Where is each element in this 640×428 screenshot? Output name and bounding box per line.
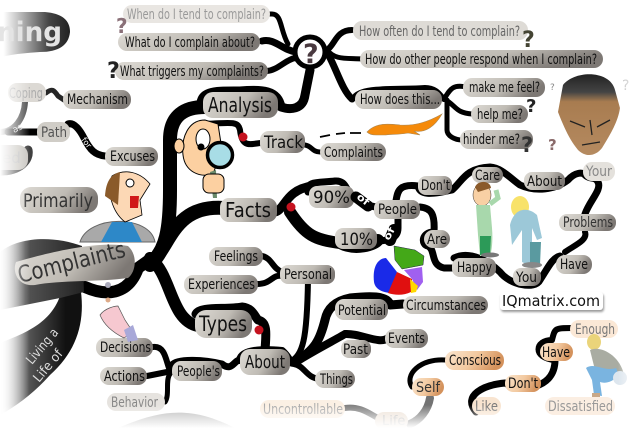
watermark: IQmatrix.com: IQmatrix.com xyxy=(502,292,600,310)
pill: Feelings: Feelings xyxy=(214,249,258,265)
orange panel branches xyxy=(345,328,572,424)
pill: Happy xyxy=(452,258,496,277)
pill: People's: People's xyxy=(177,364,220,380)
pill: Analysis: Analysis xyxy=(208,93,272,117)
main branch trunks xyxy=(85,70,378,326)
pill: Have (gray): Have xyxy=(560,257,588,273)
pill: Types: Types xyxy=(198,312,247,336)
question marks: ? xyxy=(622,78,629,94)
pill: Potential xyxy=(335,299,388,320)
pill: Events xyxy=(385,329,428,348)
pill: About top: About xyxy=(527,174,562,190)
question marks: ? xyxy=(522,28,535,53)
pill: Path: Path xyxy=(41,125,67,141)
top-left heading fragment: ning xyxy=(0,12,70,57)
pill: What triggers my complaints xyxy=(115,62,268,80)
dark band: Living a Life of xyxy=(0,285,82,415)
pill: Events: Events xyxy=(388,331,425,347)
pill: When do I tend to complain xyxy=(123,5,270,23)
pill: Things: Things xyxy=(319,372,353,388)
pill: People's xyxy=(172,361,222,381)
pill: What do I complain about xyxy=(118,33,260,51)
analysis question branches xyxy=(262,14,472,140)
pill: How often do I tend to complain: How often do I tend to complain? xyxy=(359,24,520,40)
pill: 10%: 10% xyxy=(340,230,373,250)
icon: man with magnifying glass xyxy=(174,120,232,198)
pill: Coping xyxy=(8,83,46,102)
pill: Past: Past xyxy=(343,342,368,358)
gray shapes at bottom edge xyxy=(118,413,235,428)
pill: make me feel: make me feel? xyxy=(469,80,540,96)
left branches xyxy=(0,90,105,171)
pill: Excuses: Excuses xyxy=(110,149,155,165)
pill: Experiences: Experiences xyxy=(188,277,255,293)
pill: Decisions: Decisions xyxy=(100,340,151,356)
pill: help me xyxy=(471,105,528,123)
icon: dissatisfied man xyxy=(586,334,627,401)
pill: Things xyxy=(315,370,355,388)
pill: hinder me: hinder me? xyxy=(463,132,520,148)
facts sentence branches xyxy=(308,167,599,285)
question circle hub: ? xyxy=(303,39,319,70)
pill: Don't: Don't xyxy=(421,178,450,194)
pill: Like: Like xyxy=(475,399,498,415)
question marks: ? xyxy=(550,83,555,93)
pill: How often do I tend to complain xyxy=(353,21,528,40)
pill: Track: Track xyxy=(263,133,303,153)
dark arc behind central topic xyxy=(0,239,84,310)
pill: Problems: Problems xyxy=(563,215,613,231)
question marks: ? xyxy=(548,136,557,154)
pill: ed fragment: ed xyxy=(2,149,21,167)
pill: Your: Your xyxy=(585,164,612,180)
dark band: Living a Life of: Life of xyxy=(31,347,67,386)
pill: About xyxy=(240,349,290,375)
question marks: ? xyxy=(521,133,533,157)
pill: Complaints small: Complaints xyxy=(324,145,383,161)
question marks: ? xyxy=(107,59,120,84)
pill: Dissatisfied: Dissatisfied xyxy=(548,399,613,415)
question marks xyxy=(107,14,629,157)
pill: Personal xyxy=(280,265,335,284)
icon: blond man xyxy=(510,196,542,268)
pill: Enough xyxy=(570,320,618,338)
pill: ed fragment xyxy=(0,145,28,170)
question circle hub xyxy=(295,37,325,70)
pill: Personal: Personal xyxy=(284,267,332,283)
red dots xyxy=(238,132,296,334)
icon: pie chart xyxy=(374,246,424,295)
pill: Feelings xyxy=(209,247,263,266)
pill: About: About xyxy=(245,352,285,373)
pill: Circumstances: Circumstances xyxy=(406,298,486,314)
types branches xyxy=(147,256,403,402)
pill: What do I complain about: What do I complain about? xyxy=(125,35,255,51)
pill: Primarily: Primarily xyxy=(23,190,93,212)
pill: Don't xyxy=(418,176,452,195)
pill: Conscious: Conscious xyxy=(449,353,501,369)
pill: When do I tend to complain: When do I tend to complain? xyxy=(127,7,266,23)
pill: Experiences xyxy=(184,275,258,294)
icon: angry driver xyxy=(80,172,155,242)
pill: 90%: 90% xyxy=(313,188,350,208)
pill: Conscious xyxy=(445,351,504,370)
pill: Uncontrollable: Uncontrollable xyxy=(263,402,343,418)
central topic: Complaints: Complaints xyxy=(15,237,128,289)
pill: Self: Self xyxy=(416,380,441,396)
icon: man in green xyxy=(473,182,499,258)
connector word: of (10%): of xyxy=(382,225,398,242)
icon: orange lizard xyxy=(320,114,442,137)
pill: make me feel xyxy=(463,78,545,97)
connector word: of (90%): of xyxy=(354,192,372,209)
pill: Mechanism xyxy=(63,90,131,109)
pill: help me: help me? xyxy=(477,107,523,123)
question marks: ? xyxy=(526,96,536,117)
pill: Have (orange): Have xyxy=(542,345,570,361)
pill: Behavior: Behavior xyxy=(111,395,158,411)
pill: How does this xyxy=(355,90,442,109)
pill: Decisions xyxy=(96,338,153,357)
pill: Mechanism: Mechanism xyxy=(67,92,128,108)
pill: Complaints small xyxy=(320,143,386,161)
pill: Potential: Potential xyxy=(338,303,386,319)
pill: Coping: Coping xyxy=(9,86,43,102)
pill: Care: Care xyxy=(475,168,500,184)
pill: Excuses xyxy=(105,147,158,166)
pill: People: People xyxy=(378,202,417,218)
left branches: for xyxy=(79,136,94,150)
pill: Have (gray) xyxy=(556,255,592,274)
question marks: ? xyxy=(116,14,128,38)
pill: How does this: How does this... xyxy=(360,92,440,108)
left branches: as xyxy=(11,122,25,136)
pill: Don't (orange): Don't xyxy=(508,376,538,392)
icon: pointing hand xyxy=(100,282,138,342)
pill: Are: Are xyxy=(427,232,447,248)
pill: Happy: Happy xyxy=(457,260,492,276)
pill: What triggers my complaints: What triggers my complaints? xyxy=(120,64,264,80)
dark band: Living a Life of: Living a xyxy=(24,326,62,368)
pill: Life xyxy=(375,412,408,428)
pill: Enough: Enough xyxy=(575,322,615,338)
pill: You: You xyxy=(515,270,537,286)
icon: frowning face xyxy=(558,74,620,155)
pill: Facts: Facts xyxy=(225,198,271,222)
pill: Actions: Actions xyxy=(104,369,145,385)
pill: Path xyxy=(37,122,70,142)
